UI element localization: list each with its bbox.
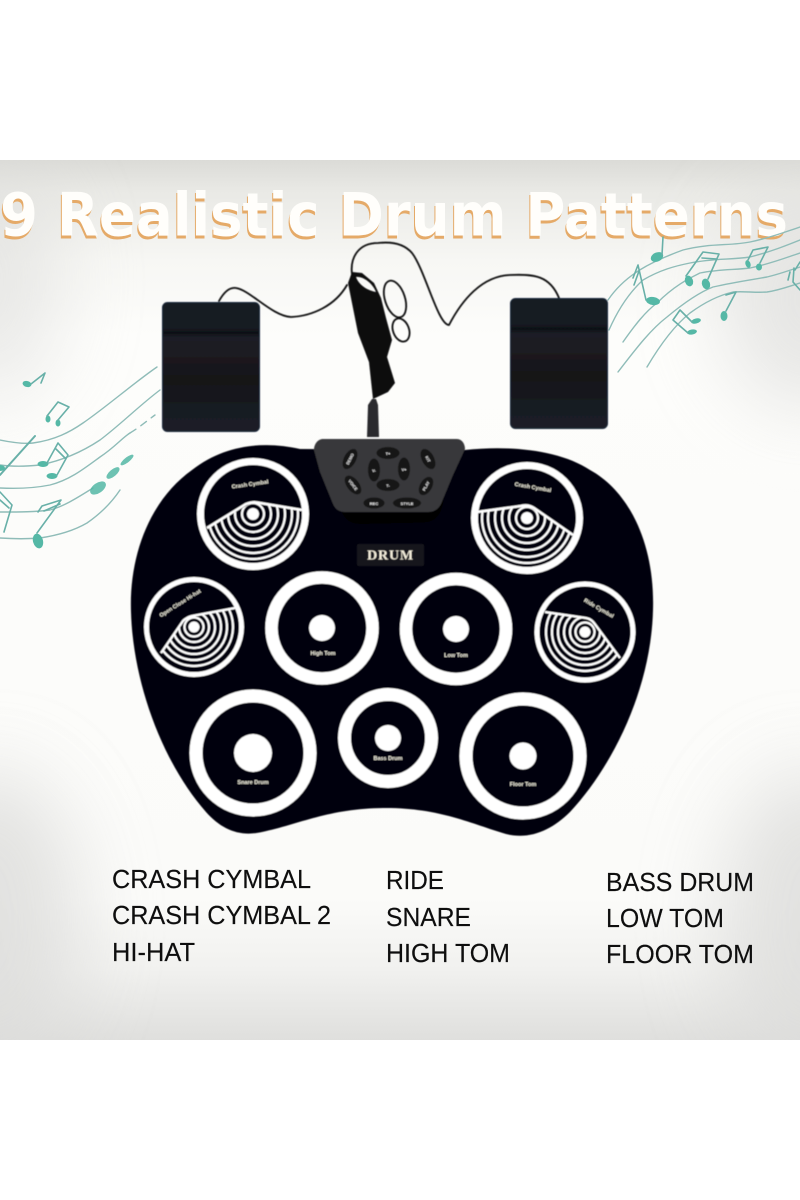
drum list: column 1 [112,864,331,967]
music staff: right [608,227,800,372]
drum list: column 2 [386,865,510,968]
icon: note right F [720,292,736,321]
button: lower right [416,474,436,498]
drum list: column 3: LOW TOM [606,903,724,933]
button: rec: REC [370,501,378,506]
foot pedal right with wire [352,243,608,428]
brand label [357,544,424,566]
pad: open close hi-hat [146,580,242,674]
pad: crash cymbal right: Crash Cymbal [514,482,552,494]
icon: beamed notes right D [744,247,768,270]
main drum illustration [131,243,653,836]
button: lower left: VOICE [347,479,359,492]
drum list: column 3 [606,867,754,969]
button: V+ [398,458,410,480]
icon: large note left [31,500,61,550]
icon: note right G [788,262,800,290]
icon: beamed notes left upper [46,402,69,426]
pad: bass drum: Bass Drum [373,756,403,762]
button: style: STYLE [401,501,414,506]
brand label: DRUM [367,548,414,564]
button: kit [418,446,438,472]
pad: floor tom [466,699,580,813]
pad: bass drum [344,694,432,782]
icon: teal brush stroke left [88,453,135,497]
pad: high tom [272,578,372,678]
pad: floor tom: Floor Tom [510,782,536,788]
icon: note right A [649,237,665,264]
drum list: column 1: HI-HAT [112,937,195,967]
icon: note left small [22,373,45,388]
control panel shadow [335,490,445,522]
drum list: column 2: SNARE [386,902,471,932]
button: rec [364,498,384,508]
button: style [393,498,421,508]
cable bundle [348,272,413,437]
button: kit: KIT [424,455,432,464]
pad: open close hi-hat: Open Close Hi-hat [159,589,202,619]
icon: beamed notes right E [673,310,701,335]
button: T- [376,479,400,491]
button: lower left [341,473,365,497]
pad: crash cymbal left: Crash Cymbal [231,479,269,491]
pad: low tom [406,579,506,679]
drum list: column 2: RIDE [386,865,444,895]
pad: low tom: Low Tom [444,653,468,659]
pad: snare drum: Snare Drum [237,780,269,786]
icon: partial note left edge [0,492,12,532]
button: T+: T+ [386,451,391,456]
drum list: column 3: BASS DRUM [606,867,754,897]
button: T+ [376,447,400,459]
button: V- [368,458,380,482]
pad: high tom: High Tom [311,651,336,657]
pad: ride cymbal [537,584,633,680]
button: lower right: PLAY [421,480,431,492]
music staff: left [0,367,160,550]
foot pedal left with wire [162,285,347,432]
icon: beamed notes left middle [38,443,68,479]
pad: snare drum [196,696,310,810]
drum list: column 2: HIGH TOM [386,938,510,968]
pad: crash cymbal right [474,466,580,570]
roll-up drum mat [131,445,653,836]
drum list: column 1: CRASH CYMBAL [112,864,311,894]
button: V-: V- [372,468,377,473]
icon: diagonal note stem left [0,436,35,475]
control panel [314,439,465,512]
icon: note right B [633,265,660,306]
icon: beamed notes right C [683,252,719,291]
button: volume [340,446,360,472]
drum list: column 1: CRASH CYMBAL 2 [112,900,331,930]
drum list: column 3: FLOOR TOM [606,939,754,969]
pad: crash cymbal left [200,462,306,566]
button: volume: DEMO [345,453,355,465]
button: V+: V+ [401,467,407,472]
background panel [0,160,800,1070]
button: T-: T- [386,483,390,488]
pad: ride cymbal: Ride Cymbal [583,598,615,620]
